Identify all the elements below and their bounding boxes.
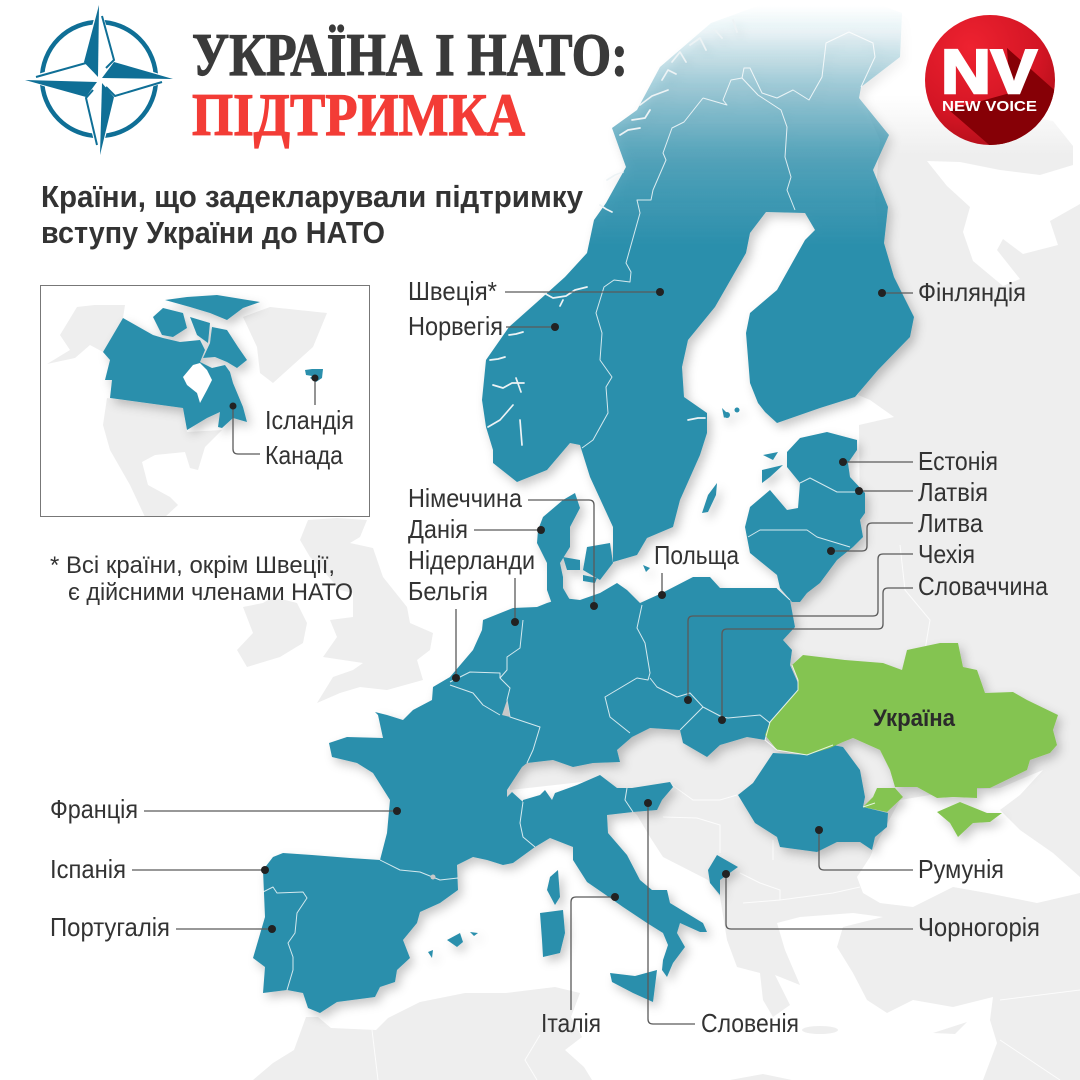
label: Чорногорія xyxy=(722,870,1040,942)
islands: Åland, Gotland, Bornholm xyxy=(643,408,740,572)
background land: grey neighbouring countries xyxy=(237,55,1080,1080)
inset background land xyxy=(47,305,327,517)
country group: France, Benelux, Germany, Poland, Czechia, Slovakia, Spain, Portugal xyxy=(253,577,798,1013)
label: Чорногорія: Чорногорія xyxy=(918,912,1040,942)
title xyxy=(192,22,628,148)
logo: NV New Voice xyxy=(925,15,1060,150)
enclaves: Luxembourg, Andorra xyxy=(430,700,510,880)
label: Словаччина: Словаччина xyxy=(918,571,1048,601)
label: Словаччина xyxy=(718,571,1048,724)
country group: Baltic states xyxy=(745,432,865,602)
label: Нідерланди: Нідерланди xyxy=(408,545,535,575)
label: Португалія: Португалія xyxy=(50,912,170,942)
logo: NV New Voice: NEW VOICE xyxy=(942,98,1037,115)
label: Іспанія xyxy=(50,854,269,884)
label: Франція xyxy=(50,794,401,824)
label: Польща: Польща xyxy=(654,540,739,570)
label: Ісландія: Ісландія xyxy=(265,405,354,435)
label: Франція: Франція xyxy=(50,794,138,824)
label: Латвія: Латвія xyxy=(918,477,988,507)
footnote xyxy=(50,552,353,606)
islands: Balearics xyxy=(428,932,478,958)
label: Португалія xyxy=(50,912,276,942)
label: Словенія xyxy=(644,799,799,1038)
label: Польща xyxy=(654,540,739,599)
label: Норвегія xyxy=(408,311,559,341)
subheading: вступу України до НАТО xyxy=(41,215,385,250)
label: Ісландія xyxy=(265,374,354,435)
label: Канада xyxy=(230,402,343,470)
label: Німеччина xyxy=(408,483,598,610)
country group: Italy and Slovenia xyxy=(520,775,707,977)
label: Німеччина: Німеччина xyxy=(408,483,522,513)
label: Данія: Данія xyxy=(408,514,468,544)
label: Швеція xyxy=(408,276,664,306)
label: Литва: Литва xyxy=(918,508,983,538)
label: Чехія: Чехія xyxy=(918,539,975,569)
label: Фінляндія xyxy=(878,277,1026,307)
footnote: * Всі країни, окрім Швеції, xyxy=(50,552,335,579)
logo: NV New Voice: NV xyxy=(941,38,1037,107)
inset map: Canada xyxy=(103,295,260,430)
label: Італія: Італія xyxy=(541,1008,601,1038)
label: Бельгія xyxy=(408,576,488,682)
label: Словенія: Словенія xyxy=(701,1008,799,1038)
inset panel: North America xyxy=(40,286,370,517)
Ukraine shape in green xyxy=(765,643,1058,837)
country: Montenegro xyxy=(708,855,738,895)
islands: Sicily xyxy=(610,970,657,1002)
label: Швеція: Швеція* xyxy=(408,276,497,306)
inset map: Iceland xyxy=(305,369,323,382)
label: Чехія xyxy=(684,539,975,704)
islands: Sardinia and Corsica xyxy=(540,870,565,957)
country group: Denmark xyxy=(537,493,613,604)
label: Литва xyxy=(827,508,983,555)
label: Україна: Україна xyxy=(873,705,956,732)
Hudson Bay xyxy=(183,363,212,403)
label: Фінляндія: Фінляндія xyxy=(918,277,1026,307)
subheading: Країни, що задекларували підтримку xyxy=(41,179,584,214)
label: Бельгія: Бельгія xyxy=(408,576,488,606)
icon: NATO compass star xyxy=(22,0,175,160)
label: Нідерланди xyxy=(408,545,535,626)
footnote: є дійсними членами НАТО xyxy=(68,579,353,606)
label: Естонія xyxy=(839,446,998,476)
inner country borders xyxy=(263,478,875,990)
label: Норвегія: Норвегія xyxy=(408,311,503,341)
label: Італія xyxy=(541,893,619,1038)
title: УКРАЇНА І НАТО: xyxy=(192,22,628,88)
label: Латвія xyxy=(855,477,988,507)
label: Іспанія: Іспанія xyxy=(50,854,126,884)
label: Канада: Канада xyxy=(265,440,343,470)
label: Данія xyxy=(408,514,545,544)
subheading xyxy=(41,179,584,250)
label: Румунія: Румунія xyxy=(918,854,1004,884)
label: Румунія xyxy=(815,826,1004,884)
map: supporting countries in teal xyxy=(253,0,1058,1013)
title: ПІДТРИМКА xyxy=(192,82,525,148)
country: Romania xyxy=(738,745,888,852)
region: Norway, Sweden, Finland xyxy=(482,0,914,562)
label: Естонія: Естонія xyxy=(918,446,998,476)
